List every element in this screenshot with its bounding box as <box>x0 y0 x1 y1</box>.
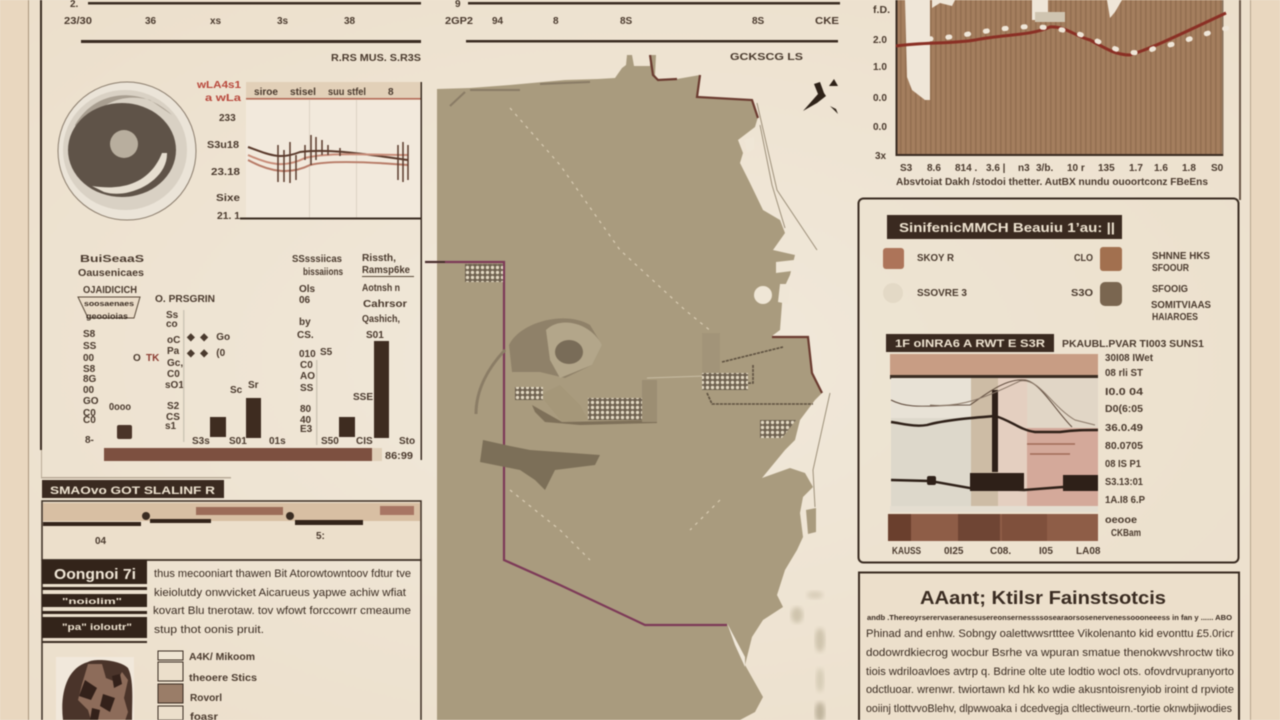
bar chart: middle left: sO1 <box>165 380 184 391</box>
bar chart: middle left: TK <box>146 353 160 364</box>
bar chart: middle left: Oausenicaes <box>78 268 144 279</box>
heading: text marker: 2GP2 <box>445 16 473 27</box>
legend swatches: HAIAROES <box>1152 312 1198 323</box>
bar chart: middle left: Ols <box>299 284 316 295</box>
bar chart: middle left: 01s <box>269 436 286 447</box>
icon: spiral disc <box>58 82 196 220</box>
heading: text marker: CKE <box>815 16 839 27</box>
bar chart: middle left: Ramsp6ke <box>362 265 410 276</box>
bar chart: middle left: O <box>133 353 141 364</box>
bar chart: middle left: Sr <box>248 380 259 391</box>
heading: text marker: 8 <box>553 16 559 27</box>
timeline panel: SMAOvo GOT SLALINF R <box>50 485 215 497</box>
bar and line chart: top right: 2.0 <box>873 35 887 46</box>
bar chart: middle left: Pa <box>167 346 180 357</box>
legend swatches: SSOVRE 3 <box>917 288 967 299</box>
bar chart: middle left: BuiSeaaS <box>80 254 144 265</box>
panel: right legend and chart: 30I08 IWet <box>1105 353 1154 364</box>
bar chart: middle left: ◆ ◆ (0 <box>186 348 226 359</box>
bar chart: middle left: Rissth, <box>362 253 396 264</box>
bar chart: middle left: OJAIDICICH <box>83 285 137 296</box>
panel: right legend and chart: LA08 <box>1076 546 1101 557</box>
bar chart: middle left: C0 <box>300 360 313 371</box>
bar and line chart: top right: 3.6 | <box>986 163 1006 174</box>
legend swatches: SOMITVIAAS <box>1151 300 1211 311</box>
bar and line chart: top right: 0.0 <box>873 122 887 133</box>
line chart: small waves: 8 <box>388 87 394 98</box>
bar chart: middle left: Cahrsor <box>363 299 407 310</box>
bar chart: middle left: S01 <box>366 330 384 341</box>
legend swatches <box>883 247 1211 323</box>
panel: bottom right article: Phinad and enhw. Sobngy oalettwwsrtttee Vikolenanto kid evonttu £5.0ricr <box>866 628 1234 640</box>
panel: right legend and chart: PKAUBL.PVAR TI003 SUNS1 <box>1062 339 1204 350</box>
panel: right legend and chart: S3.13:01 <box>1105 477 1143 488</box>
bar chart: middle left: SS <box>83 341 97 352</box>
legend: left swatches: theoere Stics <box>189 673 257 684</box>
article title: AAant; Ktilsr Fainstsotcis <box>920 588 1166 608</box>
bar chart: middle left: SSE <box>353 392 373 403</box>
area chart <box>890 354 1098 512</box>
bar chart: middle left: S5 <box>320 347 333 358</box>
origin text panel: thus mecooniart thawen Bit Atorowtowntoov fdtur tve <box>154 568 411 580</box>
timeline panel <box>42 480 421 560</box>
heading: text marker: 94 <box>492 16 504 27</box>
bar and line chart: top right: 8.6 <box>927 163 941 174</box>
bar chart: middle left: C0 <box>167 369 180 380</box>
panel: right legend and chart: D0(6:05 <box>1105 404 1143 415</box>
line chart: small waves: S3u18 <box>207 140 239 151</box>
origin text panel: kovart Blu tnerotaw. tov wfowt forccowrr cmeaume <box>153 605 411 617</box>
legend swatches: SHNNE HKS <box>1152 251 1210 262</box>
line chart: small waves: suu stfel <box>328 87 366 98</box>
bar chart: middle left: Sc <box>230 385 243 396</box>
panel: right legend and chart: 1A.I8 6.P <box>1105 495 1145 506</box>
bar and line chart: top right: 814 . <box>955 163 977 174</box>
bar chart: middle left: 40 <box>300 415 312 426</box>
bar chart: middle left: GO <box>83 396 99 407</box>
bar chart: middle left: S01 <box>229 436 247 447</box>
bar chart: middle left: Qashich, <box>362 314 400 325</box>
bar chart: middle left: 0ooo <box>109 402 131 413</box>
bar and line chart: top right <box>873 0 1228 188</box>
legend swatches: SFOOUR <box>1152 263 1190 274</box>
bar and line chart: top right: 135 <box>1098 163 1115 174</box>
line chart: small waves: 23.18 <box>211 167 241 178</box>
bar chart: middle left: Gc, <box>167 358 183 369</box>
origin text panel: "pa" ioloutr" <box>62 622 132 632</box>
top-left axis chart: 3s <box>277 16 289 27</box>
legend: left swatches: Rovorl <box>190 693 222 704</box>
line chart: small waves: 21. 1 <box>217 211 240 222</box>
map: coastline region <box>425 55 830 720</box>
origin text panel <box>42 560 421 720</box>
panel: right legend and chart <box>858 198 1238 562</box>
bar and line chart: top right: 3x <box>875 151 887 162</box>
panel: bottom right article: ooiinj tlottvvoBlehv, dlpwwoaka i dcedvegja cltlectiweurn.-tortie oknwbjiwodies <box>866 703 1232 715</box>
legend swatches: SKOY R <box>917 253 955 264</box>
panel: bottom right article: odctluoar. wrenwr. twiortawn kd hk ko wdie akusntoisrenyiob iroint d rpviote <box>866 684 1234 696</box>
bar and line chart: top right: 1.7 <box>1129 163 1143 174</box>
panel: right legend and chart: oeooe <box>1105 515 1137 526</box>
bar chart: middle left: S8 <box>83 329 96 340</box>
origin text panel: Oongnoi 7i <box>54 566 136 583</box>
origin text panel: stup thot oonis pruit. <box>154 624 264 636</box>
panel: right legend and chart: C08. <box>990 546 1011 557</box>
bar chart: middle left: 80 <box>300 404 312 415</box>
origin text panel: kieiolutdy onwvicket Aicarueus yapwe achiw wfiat <box>154 587 406 599</box>
panel: right legend and chart: I05 <box>1039 546 1053 557</box>
bar chart: middle left: CIS <box>356 436 373 447</box>
legend swatches: CLO <box>1074 253 1093 264</box>
bar chart: middle left: soosaenaes <box>84 301 134 308</box>
bar chart: middle left: oC <box>167 335 180 346</box>
panel: right legend and chart: CKBam <box>1111 528 1141 539</box>
bar and line chart: top right: 1.6 <box>1154 163 1168 174</box>
bar chart: middle left: 8- <box>85 435 94 446</box>
map route: purple border <box>425 262 727 625</box>
illustration: figure <box>56 657 134 720</box>
heading: text marker: 8S <box>620 16 633 27</box>
heading: text marker: 8S <box>752 16 765 27</box>
bar and line chart: top right: S3 <box>900 163 913 174</box>
panel: right legend and chart: 80.0705 <box>1105 441 1143 452</box>
bar chart: middle left <box>78 253 415 462</box>
panel: right legend and chart: 1F oINRA6 A RWT E S3R <box>895 338 1045 350</box>
bar and line chart: top right: 1.0 <box>873 62 887 73</box>
line chart: small waves: stisel <box>290 87 316 98</box>
bar chart: middle left: co <box>166 319 178 330</box>
bar chart: middle left: geooioias <box>86 312 129 321</box>
bar chart: middle left: C0 <box>83 415 96 426</box>
bar chart: middle left: SS <box>300 383 314 394</box>
timeline panel: 5: <box>316 531 325 542</box>
legend: left swatches: A4K/ Mikoom <box>189 652 255 663</box>
bar chart: middle left: 86:99 <box>385 451 413 462</box>
bar chart: middle left: C0 <box>83 408 96 419</box>
bar chart: middle left: SSsssiicas <box>292 254 342 265</box>
top-left axis chart: R.RS MUS. S.R3S <box>331 53 421 64</box>
bar chart: middle left: Sto <box>399 436 415 447</box>
panel: right legend and chart: 08 IS P1 <box>1105 459 1141 470</box>
panel: right legend and chart: SinifenicMMCH Beauiu 1’au: || <box>899 220 1115 235</box>
bar chart: middle left: AO <box>300 371 315 382</box>
panel: bottom right article: tiois wdriloavloes avtrp q. Bdrine olte ute lodtio wocl ots. ofovdrvupranyorto <box>866 666 1234 678</box>
line chart: small waves: wLA4s1 <box>196 80 242 91</box>
icon: compass mark <box>803 79 838 114</box>
origin text panel: "noiolim" <box>62 597 122 606</box>
top-left axis chart: 38 <box>344 16 356 27</box>
line chart: small waves: 233 <box>219 113 236 124</box>
bar chart: middle left: CS <box>166 412 180 423</box>
panel: bottom right article <box>859 572 1239 720</box>
bar chart: middle left: S8 <box>83 364 96 375</box>
panel: right legend and chart: 08 rli ST <box>1105 368 1143 379</box>
bar chart: middle left: by <box>299 317 311 328</box>
top-left axis chart: xs <box>210 16 222 27</box>
line chart: small waves <box>196 80 422 460</box>
legend: left swatches <box>158 651 257 720</box>
top-left axis chart: 23/30 <box>64 16 92 27</box>
bar chart: middle left: S2 <box>167 401 180 412</box>
panel: right legend and chart: 36.0.49 <box>1105 423 1143 434</box>
bar and line chart: top right: n3 <box>1018 163 1030 174</box>
bar chart: middle left: 8G <box>83 374 97 385</box>
panel: right legend and chart: KAUSS <box>892 546 921 557</box>
heading: text marker <box>445 0 840 42</box>
legend swatches: S3O <box>1071 288 1093 299</box>
line chart: small waves: a wLa <box>205 93 242 104</box>
timeline panel: 04 <box>95 536 107 547</box>
bar and line chart: top right: Absvtoiat Dakh /stodoi thetter. AutBX nundu ouoortconz FBeEns <box>896 177 1208 188</box>
bar chart: middle left: O. PRSGRIN <box>155 294 215 305</box>
bar and line chart: top right: 10 r <box>1067 163 1085 174</box>
panel: right legend and chart: I0.0 04 <box>1105 387 1144 398</box>
bar chart: middle left: E3 <box>300 424 313 435</box>
panel: bottom right article: dodowrdkiecrog wocbur Bsrhe va wpuran smatue thenokwvshroctw tiko <box>866 647 1234 659</box>
line chart: small waves: Sixe <box>216 193 241 204</box>
panel: right legend and chart: 0I25 <box>944 546 964 557</box>
legend swatches: SFOOIG <box>1152 284 1188 295</box>
bar chart: middle left: s1 <box>165 421 177 432</box>
bar and line chart: top right: S0 <box>1211 163 1224 174</box>
bar chart: middle left: 06 <box>299 295 311 306</box>
bar chart: middle left: 010 <box>299 349 316 360</box>
bar chart: middle left: 00 <box>83 385 95 396</box>
bar chart: middle left: CS. <box>297 330 314 341</box>
top-left axis chart: 36 <box>145 16 157 27</box>
panel: bottom right article: andb .Thereoyrserervaseranesusereonsernessssosearaorsosenervenessoooneeess in fan y ...... ABO <box>867 615 1233 622</box>
top-left axis chart <box>64 0 421 64</box>
bar chart: middle left: S3s <box>192 436 210 447</box>
coast details <box>727 103 830 720</box>
bar chart: middle left: 00 <box>83 353 95 364</box>
bar and line chart: top right: 1.8 <box>1182 163 1196 174</box>
bar and line chart: top right: 3/b. <box>1036 163 1053 174</box>
bar chart: middle left: bissaiions <box>303 267 343 278</box>
map label: GCKSCG LS <box>730 52 803 63</box>
bar chart: middle left: Aotnsh n <box>362 283 400 294</box>
line chart: small waves: siroe <box>254 87 278 98</box>
bar chart: middle left: ◆ ◆ Go <box>186 332 230 343</box>
bar chart: middle left: S50 <box>321 436 339 447</box>
bar and line chart: top right: 0.0 <box>873 93 887 104</box>
map icon: owl emblem <box>476 318 657 425</box>
bar chart: middle left: Ss <box>166 310 179 321</box>
bar and line chart: top right: f.D. <box>873 5 890 16</box>
